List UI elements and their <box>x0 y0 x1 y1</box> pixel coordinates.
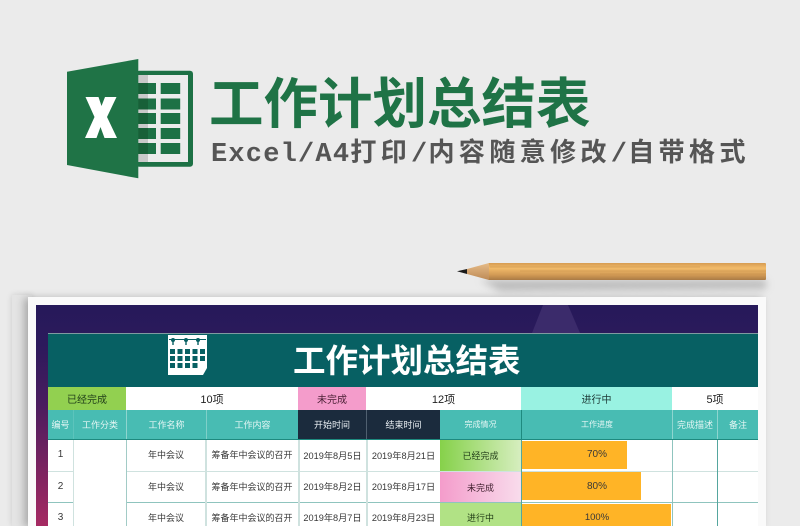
subtitle: Excel/A4打印/内容随意修改/自带格式 <box>211 131 750 170</box>
back sheet shadow <box>12 295 32 526</box>
status: in progress label: 进行中 <box>582 395 612 406</box>
row 2 <box>58 472 641 502</box>
dark gradient backdrop <box>36 305 758 526</box>
decorative triangle <box>532 305 580 333</box>
data rows <box>48 440 758 526</box>
row 3: 筹备年中会议的召开 <box>211 512 292 522</box>
header row: 工作名称 <box>148 420 184 430</box>
header row: 完成情况 <box>464 420 496 429</box>
row 1 <box>58 440 627 471</box>
completed count: 10项 <box>200 394 224 406</box>
row 3 <box>58 503 671 526</box>
icon: calendar <box>168 335 207 375</box>
summary row <box>48 387 758 410</box>
header row: 工作分类 <box>82 420 118 430</box>
row 1: 2019年8月21日 <box>372 450 435 460</box>
row 2: 2019年8月17日 <box>372 482 435 492</box>
header cells <box>48 410 73 439</box>
row 1: 已经完成 <box>462 451 498 461</box>
row 3: 3 <box>58 512 63 522</box>
row 3: 年中会议 <box>148 512 184 522</box>
row 2: 80% <box>587 480 607 492</box>
row 1: 1 <box>58 449 63 460</box>
row 2: 2019年8月2日 <box>303 482 362 492</box>
header row <box>48 410 758 440</box>
row 2: 未完成 <box>467 482 494 492</box>
table title: 工作计划总结表 <box>293 335 521 382</box>
status: unfinished label: 未完成 <box>317 395 347 406</box>
header cells: 编号 <box>51 420 70 430</box>
icon: pencil <box>457 263 768 294</box>
icon: excel logo <box>67 59 194 178</box>
row 1: 2019年8月5日 <box>303 450 362 460</box>
status: completed label: 已经完成 <box>67 395 107 406</box>
row 3: 进行中 <box>467 512 494 522</box>
row 1: 年中会议 <box>148 450 184 460</box>
row 2: 年中会议 <box>148 482 184 492</box>
header row: 工作进度 <box>581 420 613 429</box>
status: unfinished label <box>298 387 366 410</box>
row 2: 筹备年中会议的召开 <box>211 482 292 492</box>
row 1: 70% <box>587 449 607 460</box>
status: completed label <box>48 387 126 410</box>
header row: 工作内容 <box>234 420 270 430</box>
in progress count: 5项 <box>706 394 724 406</box>
row 1: 筹备年中会议的召开 <box>211 450 292 460</box>
row 3: 100% <box>585 512 609 522</box>
title: 工作计划总结表 <box>209 60 591 139</box>
row 3: 2019年8月23日 <box>372 513 435 523</box>
table banner <box>48 333 758 387</box>
header row: 结束时间 <box>385 420 422 430</box>
header row: 开始时间 <box>314 420 350 430</box>
header row: 备注 <box>729 420 747 430</box>
status: in progress label <box>521 387 672 410</box>
worksheet panel <box>28 297 766 526</box>
header row: 完成描述 <box>677 420 713 430</box>
unfinished count: 12项 <box>432 394 455 406</box>
row 3: 2019年8月7日 <box>303 513 362 523</box>
row 2: 2 <box>58 480 63 492</box>
